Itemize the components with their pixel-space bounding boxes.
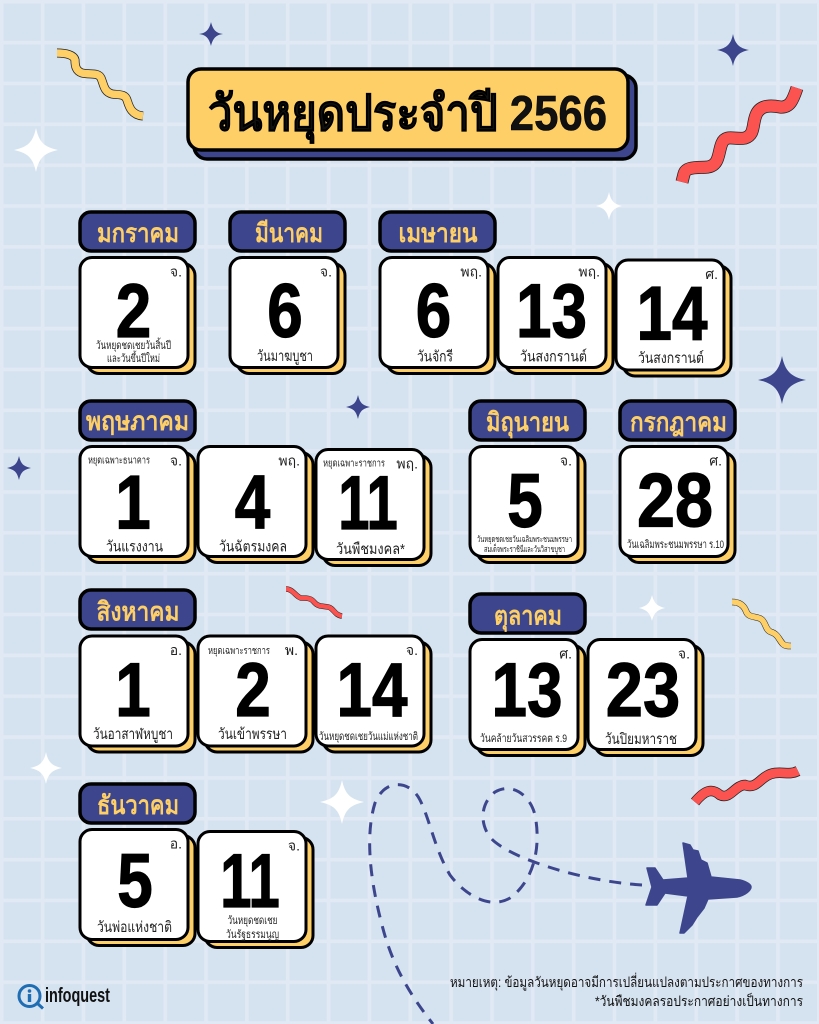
calendar card: 13 October: วันคล้ายวันสวรรคต ร.9 [480,733,567,745]
calendar card: 5 December: 5 [117,838,153,923]
calendar card: 14 April: 14 [636,270,708,356]
calendar card: 1 May: วันแรงงาน [106,538,163,556]
panel: May: พฤษภาคม [86,406,189,436]
calendar card: 1 August: 1 [115,647,151,732]
calendar card: 11 December: 11 [220,839,280,924]
calendar card: 5 December [80,830,195,946]
calendar card: 14 April: วันสงกรานต์ [638,350,704,367]
calendar card: 1 May: จ. [170,452,182,468]
calendar card: 2 January: วันหยุดชดเชยวันสิ้นปี [96,337,171,352]
calendar card: 1 August: อ. [170,642,182,658]
calendar card: 14 April: ศ. [705,266,718,282]
calendar card: 6 March: จ. [320,264,332,280]
calendar card: 6 April [380,258,495,374]
icon: airplane [646,843,751,933]
panel: January: มกราคม [97,218,179,248]
calendar card: 13 April [498,258,613,374]
decorative squiggle: red top right [682,88,797,182]
calendar card: 2 August [198,636,313,752]
calendar card: 14 August [316,636,431,752]
calendar card: 11 December: จ. [288,838,300,854]
calendar card: 11 May: 11 [338,461,398,546]
panel: August: สิงหาคม [96,596,180,626]
panel: October: ตุลาคม [494,600,562,632]
panel: January [80,212,195,374]
decorative squiggle: red bottom right [695,771,798,802]
calendar card: 6 April: วันจักรี [417,348,453,366]
calendar card: 13 April: วันสงกรานต์ [520,348,587,366]
calendar card: 11 May [316,450,431,566]
calendar card: 14 August: วันหยุดชดเชยวันแม่แห่งชาติ [319,731,418,743]
calendar card: 6 March: วันมาฆบูชา [257,348,313,365]
panel: July: กรกฎาคม [630,407,727,437]
calendar card: 4 May: พฤ. [278,452,300,468]
calendar card: 28 July: วันเฉลิมพระชนมพรรษา ร.10 [627,539,724,551]
calendar card: 13 April: พฤ. [578,264,600,280]
calendar card: 2 August: วันเข้าพรรษา [218,726,287,743]
calendar card: 2 January [80,258,195,374]
calendar card: 1 May: 1 [115,459,151,545]
calendar card: 2 August: 2 [235,647,271,732]
logo: infoquest [19,985,110,1008]
calendar card: 11 December: วันหยุดชดเชย [228,915,278,927]
calendar card: 4 May [198,446,313,562]
panel: April: เมษายน [398,218,478,248]
calendar card: 11 May: หยุดเฉพาะราชการ [323,458,385,470]
panel: March: มีนาคม [255,218,323,248]
calendar card: 6 March [230,258,345,374]
calendar card: 4 May: วันฉัตรมงคล [219,538,287,556]
panel: December [80,784,313,948]
calendar card: 1 May: หยุดเฉพาะธนาคาร [88,456,150,466]
title text: วันหยุดประจำปี 2566 [208,87,607,144]
logo: infoquest: infoquest [45,985,110,1007]
calendar card: 4 May: 4 [235,459,270,544]
footnote text [450,973,803,1009]
calendar card: 6 April: 6 [416,268,451,353]
decorative stars [7,22,806,824]
calendar card: 11 May: วันพืชมงคล* [336,541,405,558]
calendar card: 23 October: 23 [606,648,680,733]
calendar card: 28 July: 28 [637,459,713,543]
panel: May [80,401,431,566]
panel: August [80,590,431,752]
calendar card: 11 December [198,832,313,948]
calendar card: 13 October: 13 [491,647,563,732]
calendar card: 2 August: พ. [285,642,298,658]
panel: June: มิถุนายน [486,407,569,439]
calendar card: 2 January: จ. [170,264,182,280]
panel: April [380,212,731,376]
calendar card: 1 May [80,446,195,562]
calendar card: 23 October: จ. [678,646,690,662]
calendar card: 13 April: 13 [516,268,587,353]
decorative squiggle: yellow top left [57,53,143,116]
calendar card: 1 August: วันอาสาฬหบูชา [93,726,173,743]
calendar card: 2 January: 2 [116,268,151,353]
calendar card: 23 October: วันปิยมหาราช [605,731,677,748]
calendar card: 14 August: 14 [336,647,408,732]
calendar card: 2 January: และวันขึ้นปีใหม่ [107,350,160,365]
panel: March [230,212,345,374]
decorative squiggle: red small middle [286,589,342,616]
calendar card: 2 August: หยุดเฉพาะราชการ [208,646,270,657]
calendar card: 5 December: อ. [170,836,182,852]
calendar card: 5 June: สมเด็จพระราชินีและวันวิสาขบูชา [484,543,565,555]
calendar card: 13 October [470,640,585,756]
calendar card: 5 December: วันพ่อแห่งชาติ [97,919,172,936]
panel: July [620,401,735,562]
panel: June [470,401,585,562]
calendar card: 13 October: ศ. [559,646,572,662]
calendar card: 5 June [470,446,585,562]
decorative squiggle: yellow right [732,602,791,646]
calendar card: 6 April: พฤ. [460,264,482,280]
calendar card: 14 April [616,260,731,376]
calendar card: 11 May: พฤ. [396,456,418,472]
calendar card: 14 August: จ. [406,642,418,658]
calendar card: 6 March: 6 [267,268,303,353]
panel: October [470,594,703,756]
calendar card: 5 June: จ. [560,452,572,468]
title banner [188,69,636,159]
calendar card: 28 July [620,446,735,562]
calendar card: 5 June: วันหยุดชดเชยวันเฉลิมพระชนมพรรษา [477,534,572,545]
calendar card: 28 July: ศ. [709,452,722,468]
dashed flight path [370,785,642,1024]
calendar card: 23 October [588,640,703,756]
panel: December: ธันวาคม [97,790,179,820]
calendar card: 5 June: 5 [507,458,543,543]
calendar card: 1 August [80,636,195,752]
calendar card: 11 December: วันรัฐธรรมนูญ [226,929,279,941]
